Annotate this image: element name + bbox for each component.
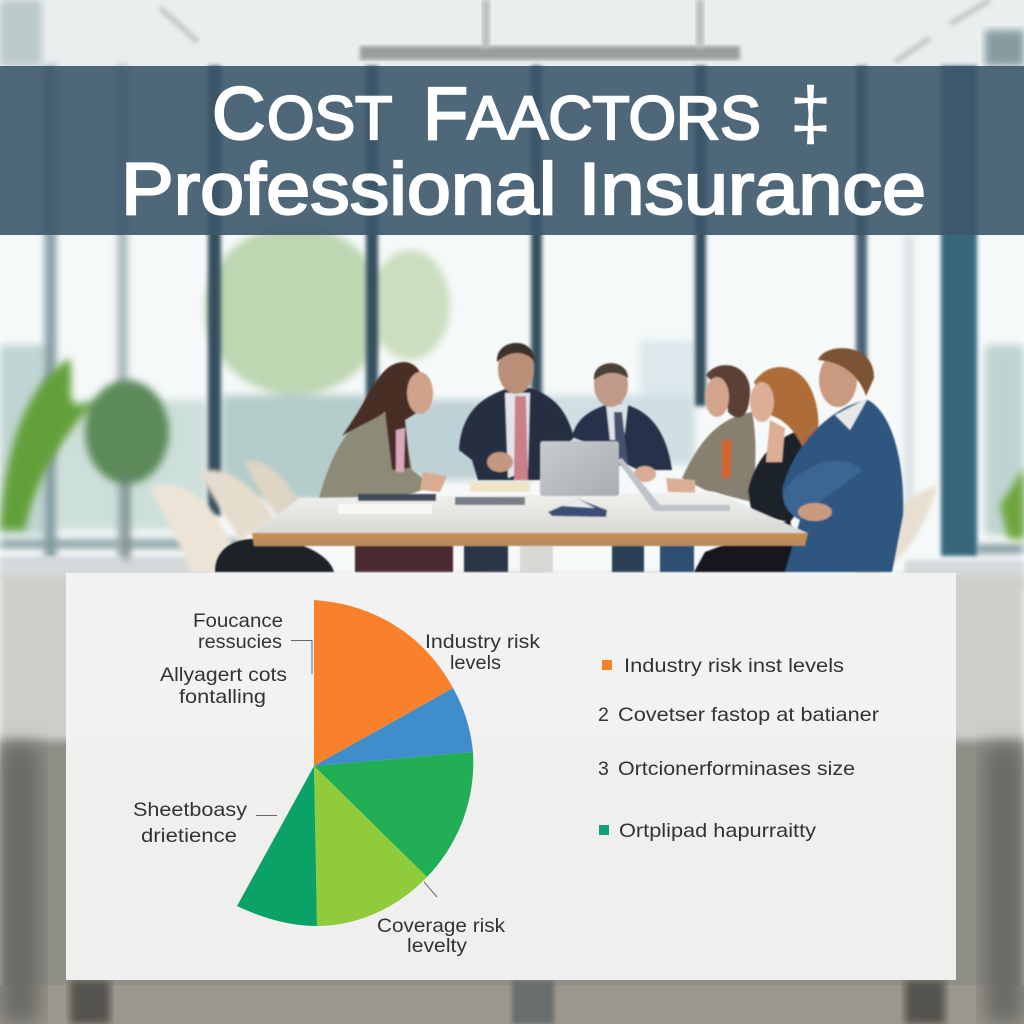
person 1 woman bbox=[318, 362, 447, 502]
title: Professional Insurance bbox=[121, 149, 926, 230]
legend bbox=[598, 655, 880, 842]
person 2 man standing bbox=[459, 343, 574, 480]
title: AACTORS bbox=[467, 84, 761, 152]
pie labels: Sheetboasy bbox=[133, 799, 247, 821]
pie labels: drietience bbox=[141, 825, 237, 847]
pie labels bbox=[133, 610, 540, 957]
legend: 3 bbox=[598, 758, 609, 780]
person 4 woman bbox=[666, 365, 755, 502]
legend: Ortplipad hapurraitty bbox=[619, 820, 816, 842]
leader lines bbox=[256, 640, 437, 897]
person 5 woman red hair bbox=[694, 367, 824, 572]
table legs bbox=[520, 546, 553, 572]
pie labels: levels bbox=[450, 652, 501, 674]
reflections seen through panel bbox=[360, 575, 880, 635]
pie labels: Foucance bbox=[193, 610, 283, 632]
meeting group bbox=[318, 343, 903, 572]
pie chart bbox=[237, 600, 473, 926]
table with laptops bbox=[215, 441, 808, 572]
pie labels: Allyagert cots bbox=[160, 664, 287, 686]
pie labels: Coverage risk bbox=[377, 915, 505, 937]
legend: Ortcionerforminases size bbox=[618, 758, 855, 780]
legend: Covetser fastop at batianer bbox=[618, 704, 880, 726]
floor bbox=[0, 556, 210, 580]
title: OST bbox=[267, 84, 391, 152]
person 6 man blue bbox=[782, 348, 903, 572]
pie labels: fontalling bbox=[179, 686, 266, 708]
pie labels: levelty bbox=[407, 935, 467, 957]
title: C bbox=[212, 72, 265, 155]
chairs bbox=[150, 461, 938, 572]
person 3 man seated bbox=[572, 363, 672, 482]
pie labels: Industry risk bbox=[425, 631, 540, 653]
chart panel bbox=[66, 573, 956, 980]
title: ‡ bbox=[790, 72, 831, 155]
pie labels: ressucies bbox=[198, 631, 282, 653]
legend: Industry risk inst levels bbox=[624, 655, 844, 677]
title bbox=[121, 72, 926, 230]
plants bbox=[0, 358, 1024, 560]
title: F bbox=[423, 72, 468, 155]
title banner bbox=[0, 66, 1024, 235]
legend: 2 bbox=[598, 704, 609, 726]
